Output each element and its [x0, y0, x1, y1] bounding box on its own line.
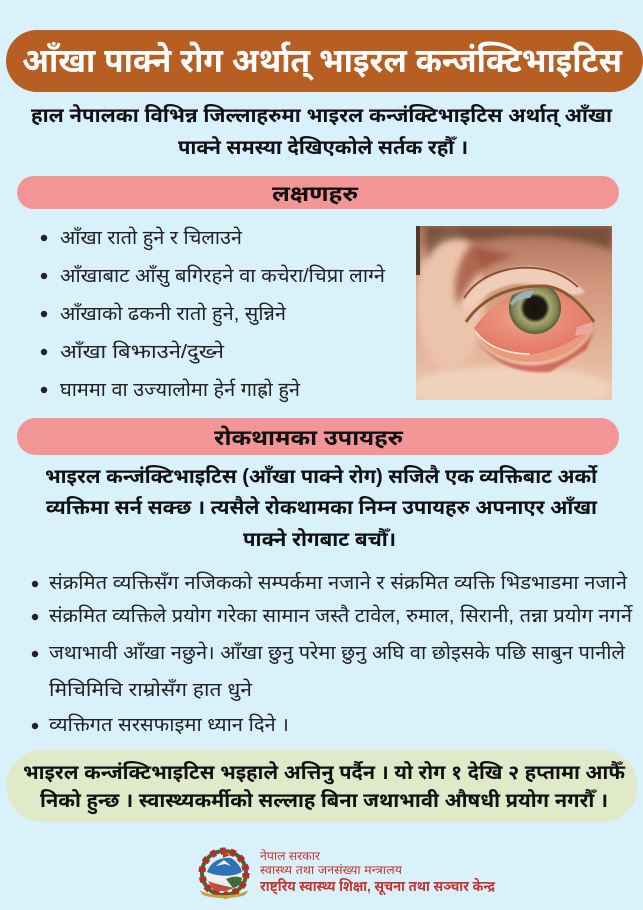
symptoms list: घाममा वा उज्यालोमा हेर्न गाह्रो हुने	[60, 378, 301, 403]
heading: symptoms	[17, 176, 619, 209]
footer organisation text	[260, 848, 496, 896]
prevention list: व्यक्तिगत सरसफाइमा ध्यान दिने ।	[49, 713, 289, 736]
prevention intro text: व्यक्तिमा सर्न सक्छ । त्यसैले रोकथामका निम्न उपायहरु अपनाएर आँखा	[45, 495, 598, 519]
prevention list: संक्रमित व्यक्तिले प्रयोग गरेका सामान जस्तै टावेल, रुमाल, सिरानी, तन्ना प्रयोग नगर्ने	[49, 604, 633, 627]
callout: advice	[7, 750, 637, 822]
footer organisation text: स्वास्थ्य तथा जनसंख्या मन्त्रालय	[260, 863, 403, 877]
prevention intro text: भाइरल कन्जंक्टिभाइटिस (आँखा पाक्ने रोग) सजिलै एक व्यक्तिबाट अर्को	[45, 464, 598, 488]
symptoms list	[41, 226, 386, 403]
prevention intro text	[45, 464, 598, 551]
prevention list	[32, 571, 633, 736]
symptoms list: आँखा बिझाउने/दुख्ने	[60, 340, 225, 364]
footer organisation text: राष्ट्रिय स्वास्थ्य शिक्षा, सूचना तथा सञ्चार केन्द्र	[260, 877, 496, 896]
heading: symptoms: लक्षणहरु	[272, 182, 359, 206]
symptoms list: आँखा रातो हुने र चिलाउने	[60, 226, 243, 251]
symptoms list: आँखाबाट आँसु बगिरहने वा कचेरा/चिप्रा लाग्ने	[60, 264, 386, 288]
photo: red eye	[410, 226, 612, 410]
footer organisation text: नेपाल सरकार	[260, 848, 321, 863]
symptoms list: आँखाको ढकनी रातो हुने, सुन्निने	[60, 302, 287, 327]
prevention list: मिचिमिचि राम्रोसँग हात धुने	[49, 678, 252, 702]
prevention list: संक्रमित व्यक्तिसँग नजिकको सम्पर्कमा नजाने र संक्रमित व्यक्ति भिडभाडमा नजाने	[49, 571, 627, 594]
heading: prevention: रोकथामका उपायहरु	[214, 425, 404, 450]
intro text: हाल नेपालका विभिन्न जिल्लाहरुमा भाइरल कन्जंक्टिभाइटिस अर्थात् आँखा	[31, 103, 613, 128]
heading: prevention	[17, 418, 619, 455]
prevention list: जथाभावी आँखा नछुने। आँखा छुनु परेमा छुनु अघि वा छोइसके पछि साबुन पानीले	[49, 641, 626, 665]
callout: advice: भाइरल कन्जंक्टिभाइटिस भइहाले अत्तिनु पर्दैन । यो रोग १ देखि २ हप्तामा आफैँ	[23, 760, 625, 785]
callout: advice: निको हुन्छ । स्वास्थ्यकर्मीको सल्लाह बिना जथाभावी औषधी प्रयोग नगरौँ ।	[40, 788, 608, 815]
icon: Nepal government emblem	[199, 849, 249, 898]
intro text	[31, 103, 613, 159]
intro text: पाक्ने समस्या देखिएकोले सर्तक रहौँ ।	[178, 135, 468, 159]
title banner	[6, 30, 643, 92]
prevention intro text: पाक्ने रोगबाट बचौँ।	[243, 527, 396, 551]
